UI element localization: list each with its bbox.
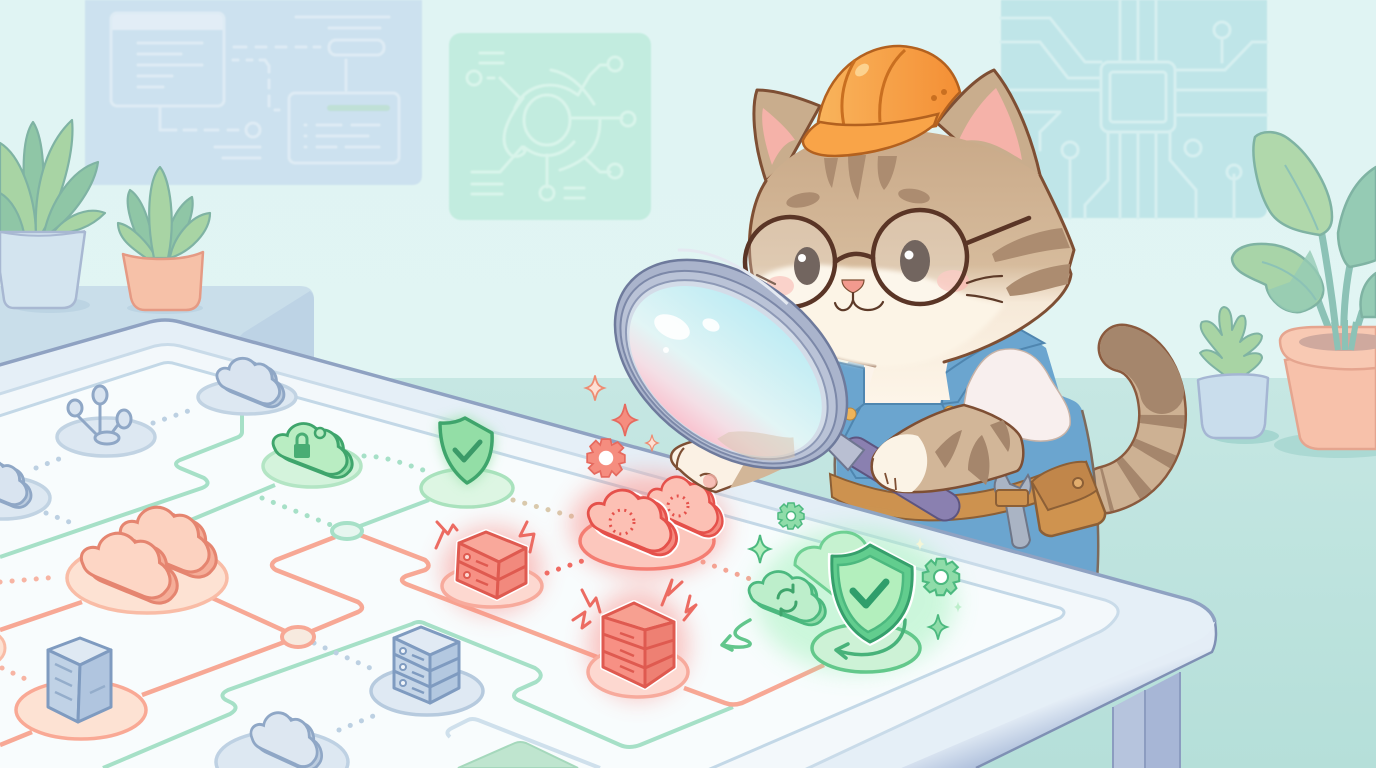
- alert glow: red: [442, 473, 726, 699]
- recovery: big green shield: [828, 541, 916, 646]
- table surface: [0, 320, 1215, 768]
- overall bib: [838, 404, 960, 478]
- red sparkles and gear: [586, 375, 658, 477]
- magnifier handle: [823, 430, 945, 506]
- table leg: [1113, 672, 1180, 768]
- table side: [880, 610, 1216, 768]
- cat head: [745, 70, 1074, 400]
- node: green shield: [421, 415, 513, 507]
- network: junction green: [332, 523, 362, 539]
- cat tail: [1105, 348, 1163, 490]
- overall straps: [837, 362, 864, 425]
- network: dotted connectors: [0, 408, 753, 730]
- node: blue cloud bottom: [216, 713, 348, 768]
- curled arrow: [722, 620, 750, 650]
- network: blue trace: [447, 719, 600, 768]
- panel: green circuit diagram on wall: [449, 33, 651, 220]
- network: green circuit traces: [0, 412, 733, 768]
- cat body with overalls: [834, 330, 1098, 580]
- network: laptop card at bottom: [458, 742, 578, 768]
- lens highlights: [650, 309, 722, 353]
- chest fur: [864, 360, 948, 405]
- plant: small plant in blue pot: [1198, 307, 1279, 444]
- whiskers: [757, 275, 1002, 302]
- wrench: [995, 470, 1031, 548]
- red server: [436, 522, 542, 607]
- node: tall blue server: [16, 638, 146, 739]
- white shirt sleeve: [964, 349, 1070, 441]
- cat left arm and paw: [671, 430, 830, 492]
- cat eyes: [794, 240, 930, 285]
- red spark marks: [573, 580, 696, 628]
- tool belt, wrench and pouch: [830, 462, 1105, 548]
- overall buttons: [844, 408, 856, 420]
- network: junction orange: [282, 627, 314, 647]
- orange hard hat: [803, 46, 960, 156]
- plant: small plant in terracotta pot: [118, 167, 210, 314]
- network: orange circuit traces: [0, 535, 824, 745]
- round glasses: [745, 210, 1029, 307]
- cat nose and mouth: [835, 280, 883, 310]
- node: blue cloud top: [198, 358, 296, 414]
- table back edge: [0, 320, 1215, 622]
- forehead stripes: [785, 155, 1070, 296]
- node: green lock cloud: [263, 424, 361, 487]
- table outer border zone: [0, 344, 1118, 768]
- cat cheeks: [766, 276, 794, 296]
- panel: circuit board on wall: [1001, 0, 1267, 218]
- magnifying glass: [575, 217, 887, 511]
- cat head outline: [749, 175, 1074, 366]
- recovery: ground disc with arrow: [812, 620, 920, 672]
- recovery: sync cloud: [722, 571, 825, 650]
- cat right arm: [872, 405, 1023, 492]
- plant: large leafy plant in blue pot: [0, 120, 105, 313]
- red server stack: [573, 580, 696, 697]
- red clouds: [580, 477, 722, 569]
- lens reflection of the arm: [717, 401, 804, 483]
- cat cream muzzle: [757, 265, 1005, 367]
- pouch: [1032, 462, 1105, 536]
- node: edge orange disc: [0, 632, 5, 664]
- panel: software diagram on wall: [85, 0, 422, 185]
- node: blue cloud left: [0, 460, 50, 519]
- red spark marks: [436, 522, 534, 552]
- recovery glow: green: [755, 528, 955, 672]
- recovery: green cloud behind shield: [795, 532, 880, 600]
- cat ears: [754, 90, 820, 181]
- shelf on left: [0, 286, 314, 380]
- cat face: [748, 130, 1074, 400]
- node: network icon: [57, 386, 155, 456]
- plant: large plant in terracotta pot: [1232, 132, 1376, 458]
- table inner zone: [0, 362, 1064, 768]
- recovery: green gears and sparkles: [750, 503, 962, 640]
- node: big orange clouds: [67, 507, 227, 613]
- floor: [300, 378, 1376, 768]
- node: blue server stack: [371, 627, 483, 715]
